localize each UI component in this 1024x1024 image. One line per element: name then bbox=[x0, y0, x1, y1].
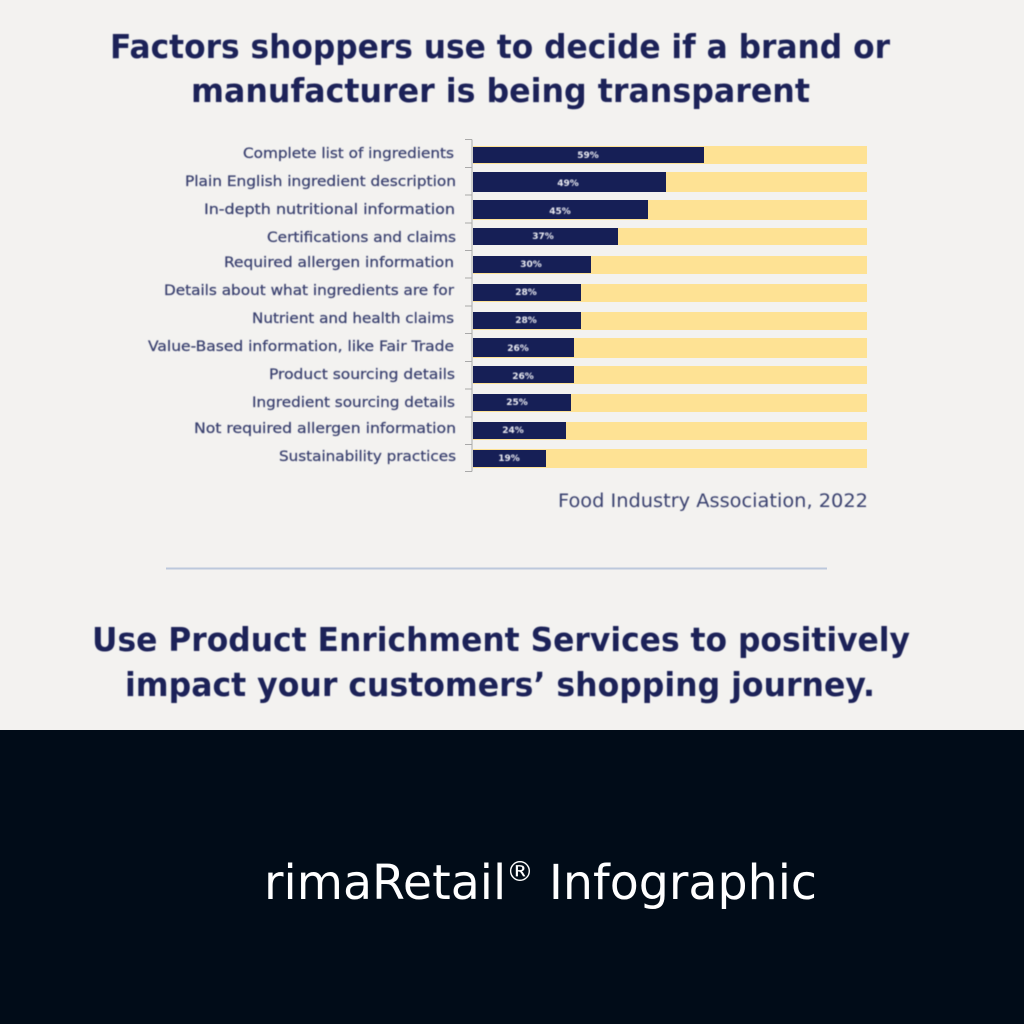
row: In-depth nutritional information 45%: 45% bbox=[549, 207, 571, 217]
row: Product sourcing details 26%: 26% bbox=[512, 372, 534, 382]
divider bbox=[166, 568, 827, 570]
title: Factors shoppers use to decide if a brand or bbox=[110, 27, 891, 66]
row: Details about what ingredients are for 28% bbox=[164, 283, 867, 302]
row: Nutrient and health claims 28%: 28% bbox=[515, 316, 537, 326]
row: Required allergen information 30% bbox=[224, 255, 867, 274]
row: Sustainability practices 19%: Sustainability practices bbox=[279, 449, 456, 465]
row: Required allergen information 30%: Required allergen information bbox=[224, 255, 454, 271]
row: Product sourcing details 26% bbox=[269, 366, 867, 384]
footer label: Infographic bbox=[534, 855, 817, 911]
row: Plain English ingredient description 49%: Plain English ingredient description bbox=[185, 174, 456, 190]
row: In-depth nutritional information 45%: In-depth nutritional information bbox=[204, 202, 455, 218]
row: Required allergen information 30%: 30% bbox=[520, 260, 542, 270]
row: Details about what ingredients are for 28%: Details about what ingredients are for bbox=[164, 283, 454, 299]
bar chart bbox=[148, 140, 867, 472]
row: Ingredient sourcing details 25%: Ingredient sourcing details bbox=[252, 395, 455, 411]
row: Product sourcing details 26%: Product sourcing details bbox=[269, 367, 455, 383]
row: Value-Based information, like Fair Trade 26%: Value-Based information, like Fair Trade bbox=[148, 339, 454, 355]
row: Value-Based information, like Fair Trade 26% bbox=[148, 338, 867, 358]
row: Sustainability practices 19% bbox=[279, 449, 867, 468]
row: Complete list of ingredients 59%: 59% bbox=[577, 151, 599, 161]
source note: Food Industry Association, 2022 bbox=[558, 491, 868, 512]
row: Complete list of ingredients 59%: Complete list of ingredients bbox=[243, 146, 454, 162]
chart axis bbox=[465, 140, 472, 472]
row: Ingredient sourcing details 25%: 25% bbox=[506, 398, 528, 408]
call to action bbox=[92, 620, 910, 704]
row: Value-Based information, like Fair Trade 26%: 26% bbox=[507, 344, 529, 354]
row: Sustainability practices 19%: 19% bbox=[498, 454, 520, 464]
footer label: rimaRetail bbox=[264, 855, 509, 911]
row: Not required allergen information 24% bbox=[194, 421, 867, 440]
row: Plain English ingredient description 49% bbox=[185, 172, 867, 192]
row: Complete list of ingredients 59% bbox=[243, 146, 867, 164]
row: Nutrient and health claims 28%: Nutrient and health claims bbox=[252, 311, 454, 327]
row: Nutrient and health claims 28% bbox=[252, 311, 867, 330]
row: Details about what ingredients are for 28%: 28% bbox=[515, 288, 537, 298]
row: Certifications and claims 37%: 37% bbox=[532, 232, 554, 242]
footer label: ® bbox=[506, 855, 534, 888]
call to action: Use Product Enrichment Services to positively bbox=[92, 620, 910, 659]
row: Not required allergen information 24%: Not required allergen information bbox=[194, 421, 456, 437]
title: manufacturer is being transparent bbox=[191, 71, 810, 110]
row: Ingredient sourcing details 25% bbox=[252, 394, 867, 412]
row: Certifications and claims 37% bbox=[267, 228, 867, 246]
call to action: impact your customers’ shopping journey. bbox=[125, 665, 875, 704]
row: In-depth nutritional information 45% bbox=[204, 200, 867, 220]
footer band bbox=[0, 730, 1024, 1024]
row: Certifications and claims 37%: Certifications and claims bbox=[267, 230, 456, 246]
row: Plain English ingredient description 49%: 49% bbox=[557, 179, 579, 189]
row: Not required allergen information 24%: 24% bbox=[502, 426, 524, 436]
chart rows bbox=[148, 146, 867, 468]
title bbox=[110, 27, 891, 110]
